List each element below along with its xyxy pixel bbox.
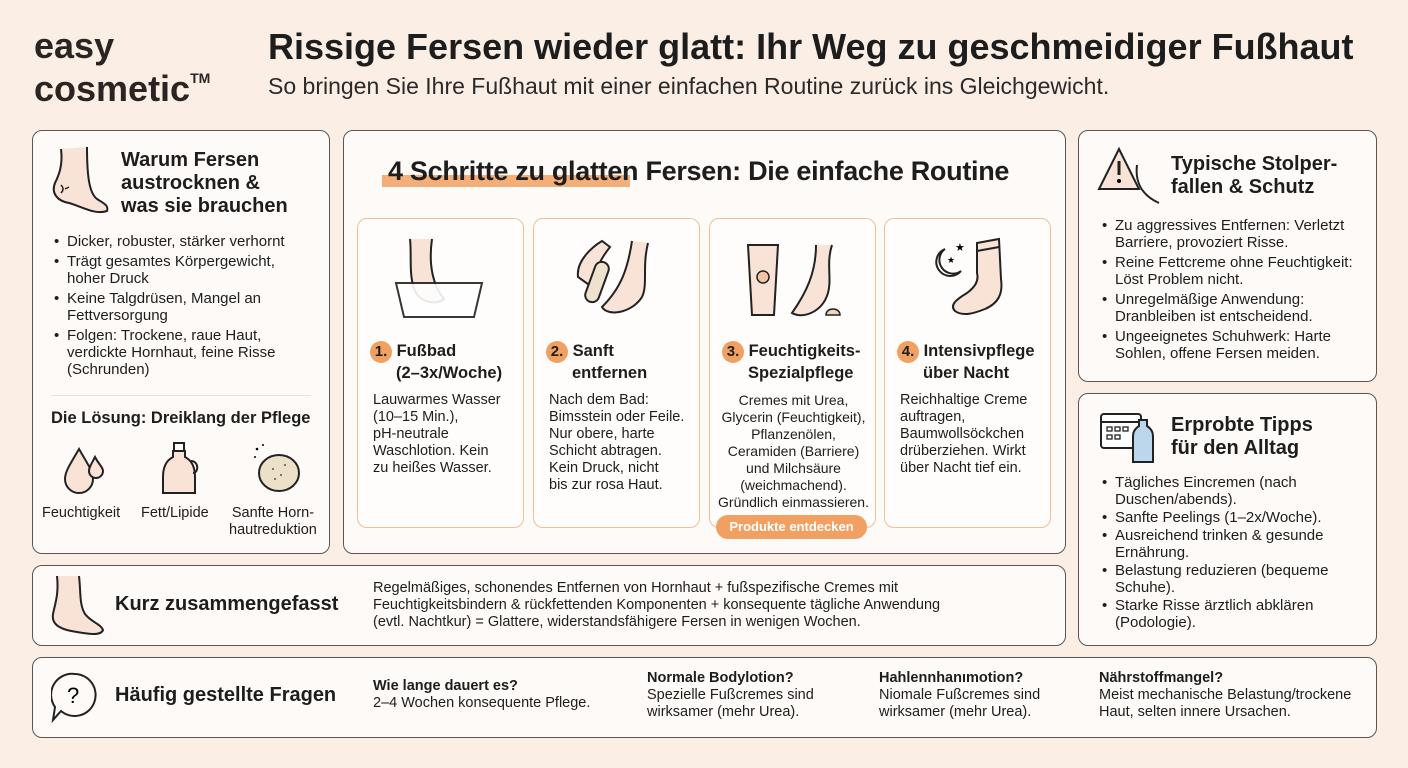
card: step 2: Nach dem Bad: [549, 392, 649, 408]
card: step 4: ★ [947, 255, 955, 265]
card: step 2 [533, 218, 700, 528]
faq 2: Normale Bodylotion? [647, 670, 794, 686]
card: step 1: 1. [375, 343, 387, 360]
panel: summary [32, 565, 1066, 646]
icons: three pillars: Fett/Lipide [141, 505, 209, 521]
card: step 4: drüberziehen. Wirkt [900, 443, 1026, 459]
icon: foot [52, 576, 104, 635]
card: step 2: Kein Druck, nicht [549, 460, 659, 476]
bullet list: Folgen: Trockene, raue Haut, verdickte Hornhaut, feine Risse (Schrunden) [67, 327, 275, 378]
icon: question bubble: ? [67, 683, 79, 708]
list: Belastung reduzieren (bequeme Schuhe). [1115, 562, 1328, 596]
icons: three pillars [42, 442, 317, 538]
card: step 1: (2–3x/Woche) [396, 364, 502, 382]
card: step 3: und Milchsäure [746, 460, 841, 476]
bullet list: Dicker, robuster, stärker verhornt [67, 233, 285, 250]
card: step 1 [357, 218, 524, 528]
list [1102, 217, 1353, 362]
card: step 4: über Nacht tief ein. [900, 460, 1022, 476]
icons: three pillars: Feuchtigkeit [42, 505, 120, 521]
card: step 1: Fußbad [397, 342, 456, 360]
card: step 1: pH-neutrale [373, 426, 449, 442]
faq 3: wirksamer (mehr Urea). [879, 704, 1031, 720]
faq 3: Niomale Fußcremes sind [879, 687, 1040, 703]
panel: tips [1078, 393, 1377, 646]
card: step 2: entfernen [572, 364, 647, 382]
icons: three pillars: Sanfte Horn- [232, 505, 314, 521]
card: step 2: Nur obere, harte [549, 426, 655, 442]
heading: Kurz zusammengefasst [115, 593, 338, 615]
heading: austrocknen & [121, 172, 260, 194]
faq 2 [647, 670, 814, 720]
card: step 3: Feuchtigkeits- [749, 342, 860, 360]
card: step 3: Gründlich einmassieren. [718, 494, 869, 510]
heading with highlight [382, 175, 630, 187]
button: Produkte entdecken: Produkte entdecken [729, 519, 854, 534]
faq 4: Nährstoffmangel? [1099, 670, 1223, 686]
faq 3: Hahlennhanımotion? [879, 670, 1023, 686]
faq 1: Wie lange dauert es? [373, 678, 518, 694]
heading: Häufig gestellte Fragen [115, 684, 336, 706]
panel: 4 steps [343, 130, 1066, 554]
card: step 4: Baumwollsöckchen [900, 426, 1024, 442]
card: step 3: 3. [727, 343, 739, 360]
icon: question bubble [51, 672, 97, 724]
card: step 4: 4. [902, 343, 914, 360]
list: Reine Fettcreme ohne Feuchtigkeit: Löst Problem nicht. [1115, 254, 1353, 288]
card: step 3 [709, 218, 876, 528]
heading [1171, 414, 1313, 459]
card: step 3: Cremes mit Urea, [739, 392, 848, 408]
card: step 4: über Nacht [923, 364, 1009, 382]
card: step 3: Ceramiden (Barriere) [728, 443, 859, 459]
panel: pitfalls [1078, 130, 1377, 382]
title: Rissige Fersen wieder glatt: Ihr Weg zu geschmeidiger Fußhaut [268, 26, 1354, 67]
faq 3 [879, 670, 1040, 720]
card: step 4: Reichhaltige Creme [900, 392, 1027, 408]
card: step 1: Lauwarmes Wasser [373, 392, 501, 408]
card: step 2: Sanft [573, 342, 614, 360]
card: step 4 [884, 218, 1051, 528]
bullet list: Keine Talgdrüsen, Mangel an Fettversorgung [67, 290, 261, 324]
icon: heel [52, 147, 108, 214]
icon: calendar & bottle [1100, 413, 1154, 463]
panel: causes [32, 130, 330, 554]
faq 4: Meist mechanische Belastung/trockene [1099, 687, 1351, 703]
heading: für den Alltag [1171, 437, 1299, 459]
text: Regelmäßiges, schonendes Entfernen von Hornhaut + fußspezifische Cremes mit Feuchtigkeitsbindern & rückfettenden Komponenten + konsequente tägliche Anwendung (evtl. Nachtkur) = Glattere, widerstandsfähigere Fersen in wenigen Wochen. [373, 580, 940, 630]
faq 2: wirksamer (mehr Urea). [647, 704, 799, 720]
list: Unregelmäßige Anwendung: Dranbleiben ist entscheidend. [1115, 291, 1313, 325]
logo: easy [34, 25, 114, 66]
logo: cosmeticTM [34, 68, 210, 109]
heading [1171, 153, 1337, 198]
heading: Warum Fersen [121, 149, 259, 171]
card: step 3: (weichmachend). [740, 477, 847, 493]
bullet list: Trägt gesamtes Körpergewicht, hoher Druck [67, 253, 275, 287]
card: step 2: Schicht abtragen. [549, 443, 662, 459]
subtitle: So bringen Sie Ihre Fußhaut mit einer einfachen Routine zurück ins Gleichgewicht. [268, 73, 1109, 99]
card: step 1: zu heißes Wasser. [373, 460, 492, 476]
card: step 2: Bimsstein oder Feile. [549, 409, 684, 425]
card: step 1: (10–15 Min.), [373, 409, 458, 425]
heading: Erprobte Tipps [1171, 414, 1313, 436]
icon: warning [1097, 146, 1160, 204]
card: step 2: bis zur rosa Haut. [549, 477, 663, 493]
card: step 3: Spezialpflege [748, 364, 853, 382]
heading [121, 149, 288, 217]
faq 1 [373, 678, 590, 711]
faq 1: 2–4 Wochen konsequente Pflege. [373, 695, 590, 711]
list: Tägliches Eincremen (nach Duschen/abends). [1115, 474, 1297, 508]
list: Ungeeignetes Schuhwerk: Harte Sohlen, offene Fersen meiden. [1115, 328, 1331, 362]
heading: Typische Stolper- [1171, 153, 1337, 175]
card: step 1: Waschlotion. Kein [373, 443, 489, 459]
card: step 4: ★ [955, 242, 965, 254]
card: step 2: 2. [551, 343, 563, 360]
heading: fallen & Schutz [1171, 176, 1314, 198]
card: step 3: Pflanzenölen, [751, 426, 836, 442]
list: Starke Risse ärztlich abklären (Podologie). [1115, 597, 1313, 631]
list: Zu aggressives Entfernen: Verletzt Barriere, provoziert Risse. [1115, 217, 1344, 251]
subheading: solution: Die Lösung: Dreiklang der Pflege [51, 409, 310, 427]
faq 2: Spezielle Fußcremes sind [647, 687, 814, 703]
logo [34, 25, 210, 109]
icons: three pillars: hautreduktion [229, 522, 317, 538]
faq 4 [1099, 670, 1351, 720]
card: step 4: Intensivpflege [924, 342, 1035, 360]
button: Produkte entdecken [716, 515, 867, 539]
card: step 3: Glycerin (Feuchtigkeit), [722, 409, 865, 425]
list [1102, 474, 1328, 631]
bullet list [54, 233, 285, 378]
heading: was sie brauchen [121, 195, 288, 217]
list: Ausreichend trinken & gesunde Ernährung. [1115, 527, 1323, 561]
faq 4: Haut, selten innere Ursachen. [1099, 704, 1291, 720]
panel: 4 steps: 4 Schritte zu glatten Fersen: Die einfache Routine [388, 156, 1009, 186]
list: Sanfte Peelings (1–2x/Woche). [1115, 509, 1322, 526]
panel: FAQ [32, 657, 1377, 738]
card: step 4: auftragen, [900, 409, 965, 425]
